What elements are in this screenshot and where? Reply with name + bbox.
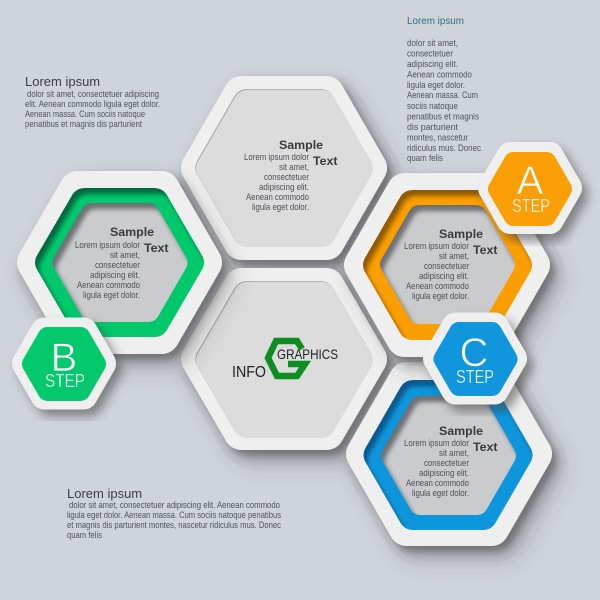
text: GRAPHICS: GRAPHICS [277,346,338,362]
panel: center logo hexagon [199,286,369,432]
text: green sample heading [110,225,169,255]
text: top sample body: sit amet, [279,162,309,172]
text block: top right: montes, nascetur [407,132,468,142]
text: blue sample body: Aenean commodo [406,478,469,488]
text: top sample heading: Sample [279,138,323,152]
text: top sample body: consectetuer [264,172,309,182]
text block: top right: dis parturient [407,121,458,132]
text: green sample body: consectetuer [95,260,140,270]
text block: top right: Aenean commodo [407,68,472,80]
badge: A step: A [517,159,544,203]
text: orange sample heading [439,227,498,257]
text block: top right: Lorem ipsum [407,15,464,27]
text block: top right: adipiscing elit. [407,58,458,69]
text block: top left: Lorem ipsum [25,74,100,89]
panel: orange hexagon [362,191,532,339]
text block: top right: sociis natoque [407,100,458,111]
badge: C step: C [460,331,488,375]
text block: top left: penatibus et magnis dis parturient [25,118,142,129]
text: blue sample heading: Text [473,440,498,454]
text block: top left: dolor sit amet, consectetuer adipiscing [27,88,159,99]
text: blue sample body: adipiscing elit. [419,468,469,478]
text: top sample body: adipiscing elit. [259,182,309,192]
text: orange sample body: consectetuer [424,261,469,271]
text: top sample heading [279,138,338,168]
text block: bottom left: Lorem ipsum [67,486,142,501]
text: blue sample body: Lorem ipsum dolor [404,438,469,448]
text block: top left: Aenean massa. Cum sociis natoque [25,108,145,119]
text: green sample body: ligula eget dolor. [83,290,140,300]
badge: B step: B [51,336,77,380]
text block: bottom left: et magnis dis parturient montes, nascetur ridiculus mus. Donec [67,519,281,530]
text: INFO: INFO [232,364,266,381]
text block: top right: quam felis [407,152,443,163]
panel: top grey hexagon [199,94,369,242]
text: blue sample heading: Sample [439,424,483,438]
text block: top right: Aenean massa. Cum [407,89,478,100]
text: green sample body: sit amet, [110,250,140,260]
text: orange sample body: Lorem ipsum dolor [404,241,469,251]
badge: A step: STEP [512,196,550,216]
text: orange sample body: Aenean commodo [406,281,469,291]
text block: top right: ligula eget dolor. [407,79,465,90]
text block: top right: consectetuer [407,48,453,58]
text: top sample body: Aenean commodo [246,192,309,202]
text block: top right: ridiculus mus. Donec [407,142,481,153]
text: orange sample body: adipiscing elit. [419,271,469,281]
text: top sample body: Lorem ipsum dolor [244,152,309,162]
text: top sample heading: Text [313,154,338,168]
badge: A step [492,156,568,220]
text: orange sample body [404,241,469,301]
text block: bottom left: dolor sit amet, consectetuer adipiscing elit. Aenean commodo [69,499,280,510]
text: top sample body [244,152,309,212]
text block: bottom left [67,486,281,540]
badge: C step [437,326,513,390]
text: orange sample body: sit amet, [439,251,469,261]
text block: top right [407,15,481,163]
text: blue sample heading [439,424,498,454]
panel: green hexagon [35,189,204,336]
text: orange sample heading: Text [473,243,498,257]
text: green sample body: Lorem ipsum dolor [75,240,140,250]
text: orange sample body: ligula eget dolor. [412,291,469,301]
badge: B step: STEP [45,371,85,391]
text: green sample body [75,240,140,300]
text block: top right: dolor sit amet, [407,37,458,48]
panel: blue hexagon [364,380,534,528]
text: top sample body: ligula eget dolor. [252,202,309,212]
text block: top left: elit. Aenean commodo ligula eget dolor. [25,98,160,109]
text: green sample body: Aenean commodo [77,280,140,290]
text: blue sample body: ligula eget dolor. [412,488,469,498]
badge: C step: STEP [456,367,494,387]
text block: bottom left: ligula eget dolor. Aenean massa. Cum sociis natoque penatibus [67,509,281,520]
text: blue sample body [404,438,469,498]
text: blue sample body: sit amet, [439,448,469,458]
text: green sample body: adipiscing elit. [90,270,140,280]
text: blue sample body: consectetuer [424,458,469,468]
icon: G logo [268,341,305,376]
badge: B step [26,332,102,396]
text block: bottom left: quam felis [67,529,102,540]
text: green sample heading: Text [144,241,169,255]
text block: top right: penatibus et magnis [407,110,479,122]
text block: top left [25,74,160,129]
text: orange sample heading: Sample [439,227,483,241]
text: green sample heading: Sample [110,225,154,239]
